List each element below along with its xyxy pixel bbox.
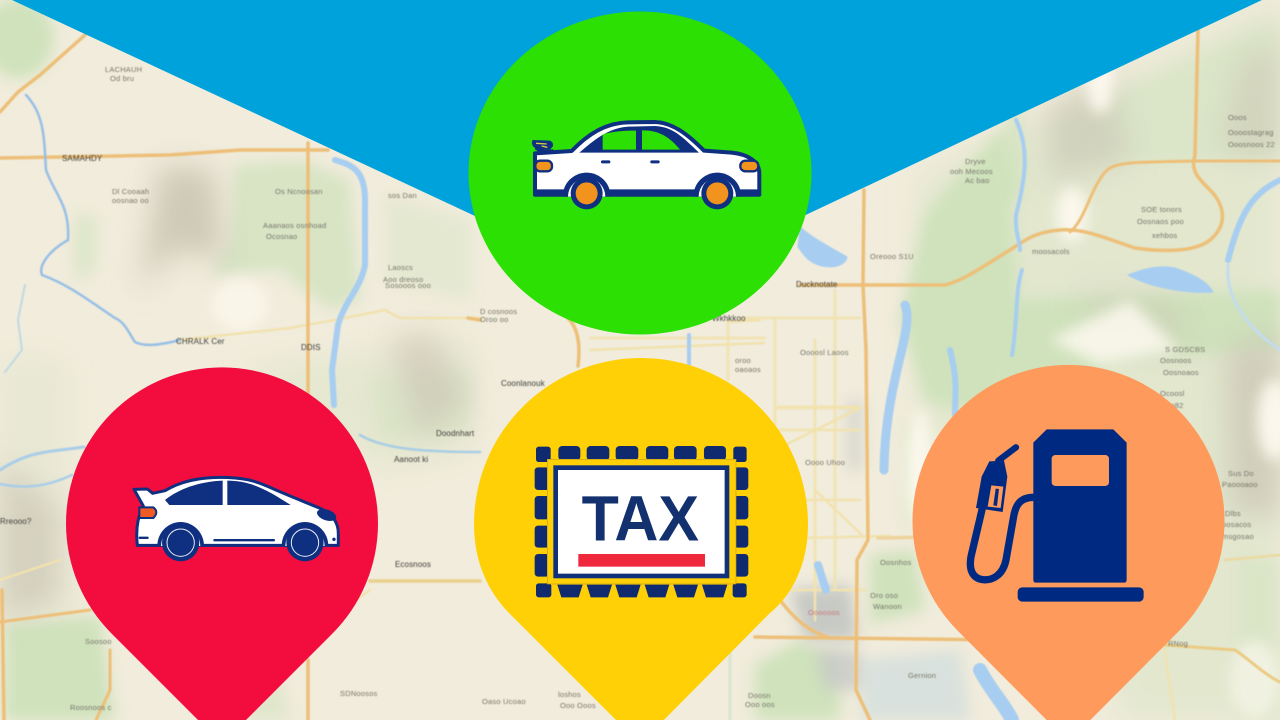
rear wheel — [563, 173, 611, 209]
tail light — [139, 507, 156, 518]
map place labels: Oosnoos — [1160, 356, 1191, 365]
map place labels: Dryve — [965, 157, 986, 166]
map place labels: Aaanaos osnhoad — [263, 221, 326, 230]
map place labels: SAMAHDY — [62, 154, 103, 163]
map place labels: oaoaos — [735, 365, 761, 374]
car body — [535, 122, 759, 195]
map place labels: Os Ncnoosan — [275, 187, 323, 196]
map place labels: Oooosl Laoos — [800, 348, 849, 357]
map place labels: Coonlanouk — [501, 379, 546, 388]
rear wheel — [157, 522, 204, 561]
map place labels: Ducknotate — [796, 280, 838, 289]
front wheel — [693, 173, 741, 209]
windows — [603, 131, 636, 150]
map place labels: Oooooos — [808, 608, 840, 617]
pump display — [1052, 455, 1109, 486]
map place labels: S GDSCBS — [1165, 345, 1205, 354]
map place labels: Doosn — [748, 691, 771, 700]
map place labels: Ooo Ooos — [560, 701, 596, 710]
map place labels: Ooo oos — [745, 700, 775, 709]
front wheel — [282, 522, 328, 561]
map place labels: Ocosnao — [266, 232, 297, 241]
pump base — [1018, 587, 1144, 602]
map place labels: D cosnoos — [480, 307, 517, 316]
map place labels: Dl Cooaah — [112, 187, 149, 196]
map place labels: Paoooaoo — [1222, 480, 1258, 489]
map place labels: Sus Do — [1228, 469, 1254, 478]
map place labels: Oro oso — [870, 591, 898, 600]
map place labels: Oroo oo — [480, 315, 508, 324]
map place labels: RNog — [1168, 639, 1188, 648]
trim line — [213, 539, 275, 541]
nozzle slot — [988, 485, 1003, 508]
map place labels: loshos — [558, 690, 581, 699]
map place labels: Oosnaos poo — [1137, 217, 1184, 226]
stamp perforation teeth — [535, 446, 748, 597]
icon: tax stamp — [535, 446, 748, 597]
map place labels: Wanoon — [873, 602, 902, 611]
map place labels: xehbos — [1152, 231, 1177, 240]
map place labels: oroo — [735, 356, 751, 365]
green circle pin — [468, 12, 812, 334]
pump body — [1033, 429, 1127, 583]
map place labels: Oosnhos — [880, 558, 911, 567]
top blue banner — [12, 0, 1262, 293]
yellow map pin — [474, 358, 808, 720]
nozzle — [976, 461, 1007, 512]
map place labels: Gernion — [908, 671, 936, 680]
map place labels: Ecosnoos — [395, 560, 431, 569]
head light — [740, 161, 758, 171]
map place labels: Ocoosl — [1160, 389, 1185, 398]
map place labels: Sosooos ooo — [385, 281, 431, 290]
map place labels: SOE tonors — [1141, 205, 1182, 214]
window frame — [579, 126, 699, 153]
map place labels: Ac bao — [965, 176, 990, 185]
map place labels: Wkhkkoo — [712, 314, 746, 323]
body — [134, 477, 338, 545]
map place labels: Oooo Uhoo — [805, 458, 845, 467]
TAX label: TAX — [582, 483, 699, 555]
red underline — [578, 554, 705, 567]
map place labels: Doodnhart — [436, 429, 475, 438]
map place labels: ooh Mecoos — [950, 167, 993, 176]
map place labels: Aoo dreoso — [383, 275, 423, 284]
map place labels: Od bru — [110, 74, 134, 83]
map place labels: Roosnoos c — [70, 703, 112, 712]
map place labels: DDIS — [301, 343, 321, 352]
icon: white hatchback car — [134, 477, 338, 561]
map place labels: SDNoosos — [340, 689, 377, 698]
icon: fuel pump — [970, 429, 1144, 602]
map place labels: Dlbs — [1225, 509, 1241, 518]
map place labels: oosacos — [1222, 520, 1251, 529]
map place labels: msgosao — [1222, 532, 1254, 541]
red map pin — [66, 367, 378, 720]
map place labels: Aanoot ki — [394, 455, 428, 464]
map place labels: oosnao oo — [112, 196, 149, 205]
map place labels: Ooosnoos 22 — [1228, 140, 1275, 149]
icon: side-view sedan with orange wheels — [532, 122, 760, 209]
spoiler — [532, 140, 553, 149]
map place labels: Oreooo S1U — [870, 252, 914, 261]
map place labels: Oaso Ucoao — [482, 697, 526, 706]
head light — [315, 507, 338, 523]
map place labels: Ooos — [1228, 113, 1247, 122]
map place labels: Ooo82 — [1160, 401, 1184, 410]
map place labels: LACHAUH — [105, 65, 142, 74]
map place labels: sos Dan — [388, 191, 417, 200]
sill — [533, 189, 760, 197]
map place labels: Oosnoaos — [1163, 368, 1199, 377]
map place labels: moosacols — [1032, 247, 1070, 256]
orange map pin — [912, 365, 1224, 720]
stamp card — [547, 459, 736, 584]
map place labels: Oooostagrag — [1228, 128, 1274, 137]
tail light — [535, 161, 552, 171]
map place labels: Rreooo? — [0, 517, 32, 526]
map place labels: Laoscs — [388, 263, 413, 272]
hose — [970, 497, 1034, 580]
map place labels: Soosoo — [85, 637, 112, 646]
map place labels: CHRALK Cer — [176, 337, 225, 346]
windows — [165, 481, 223, 505]
door handles — [601, 160, 610, 163]
